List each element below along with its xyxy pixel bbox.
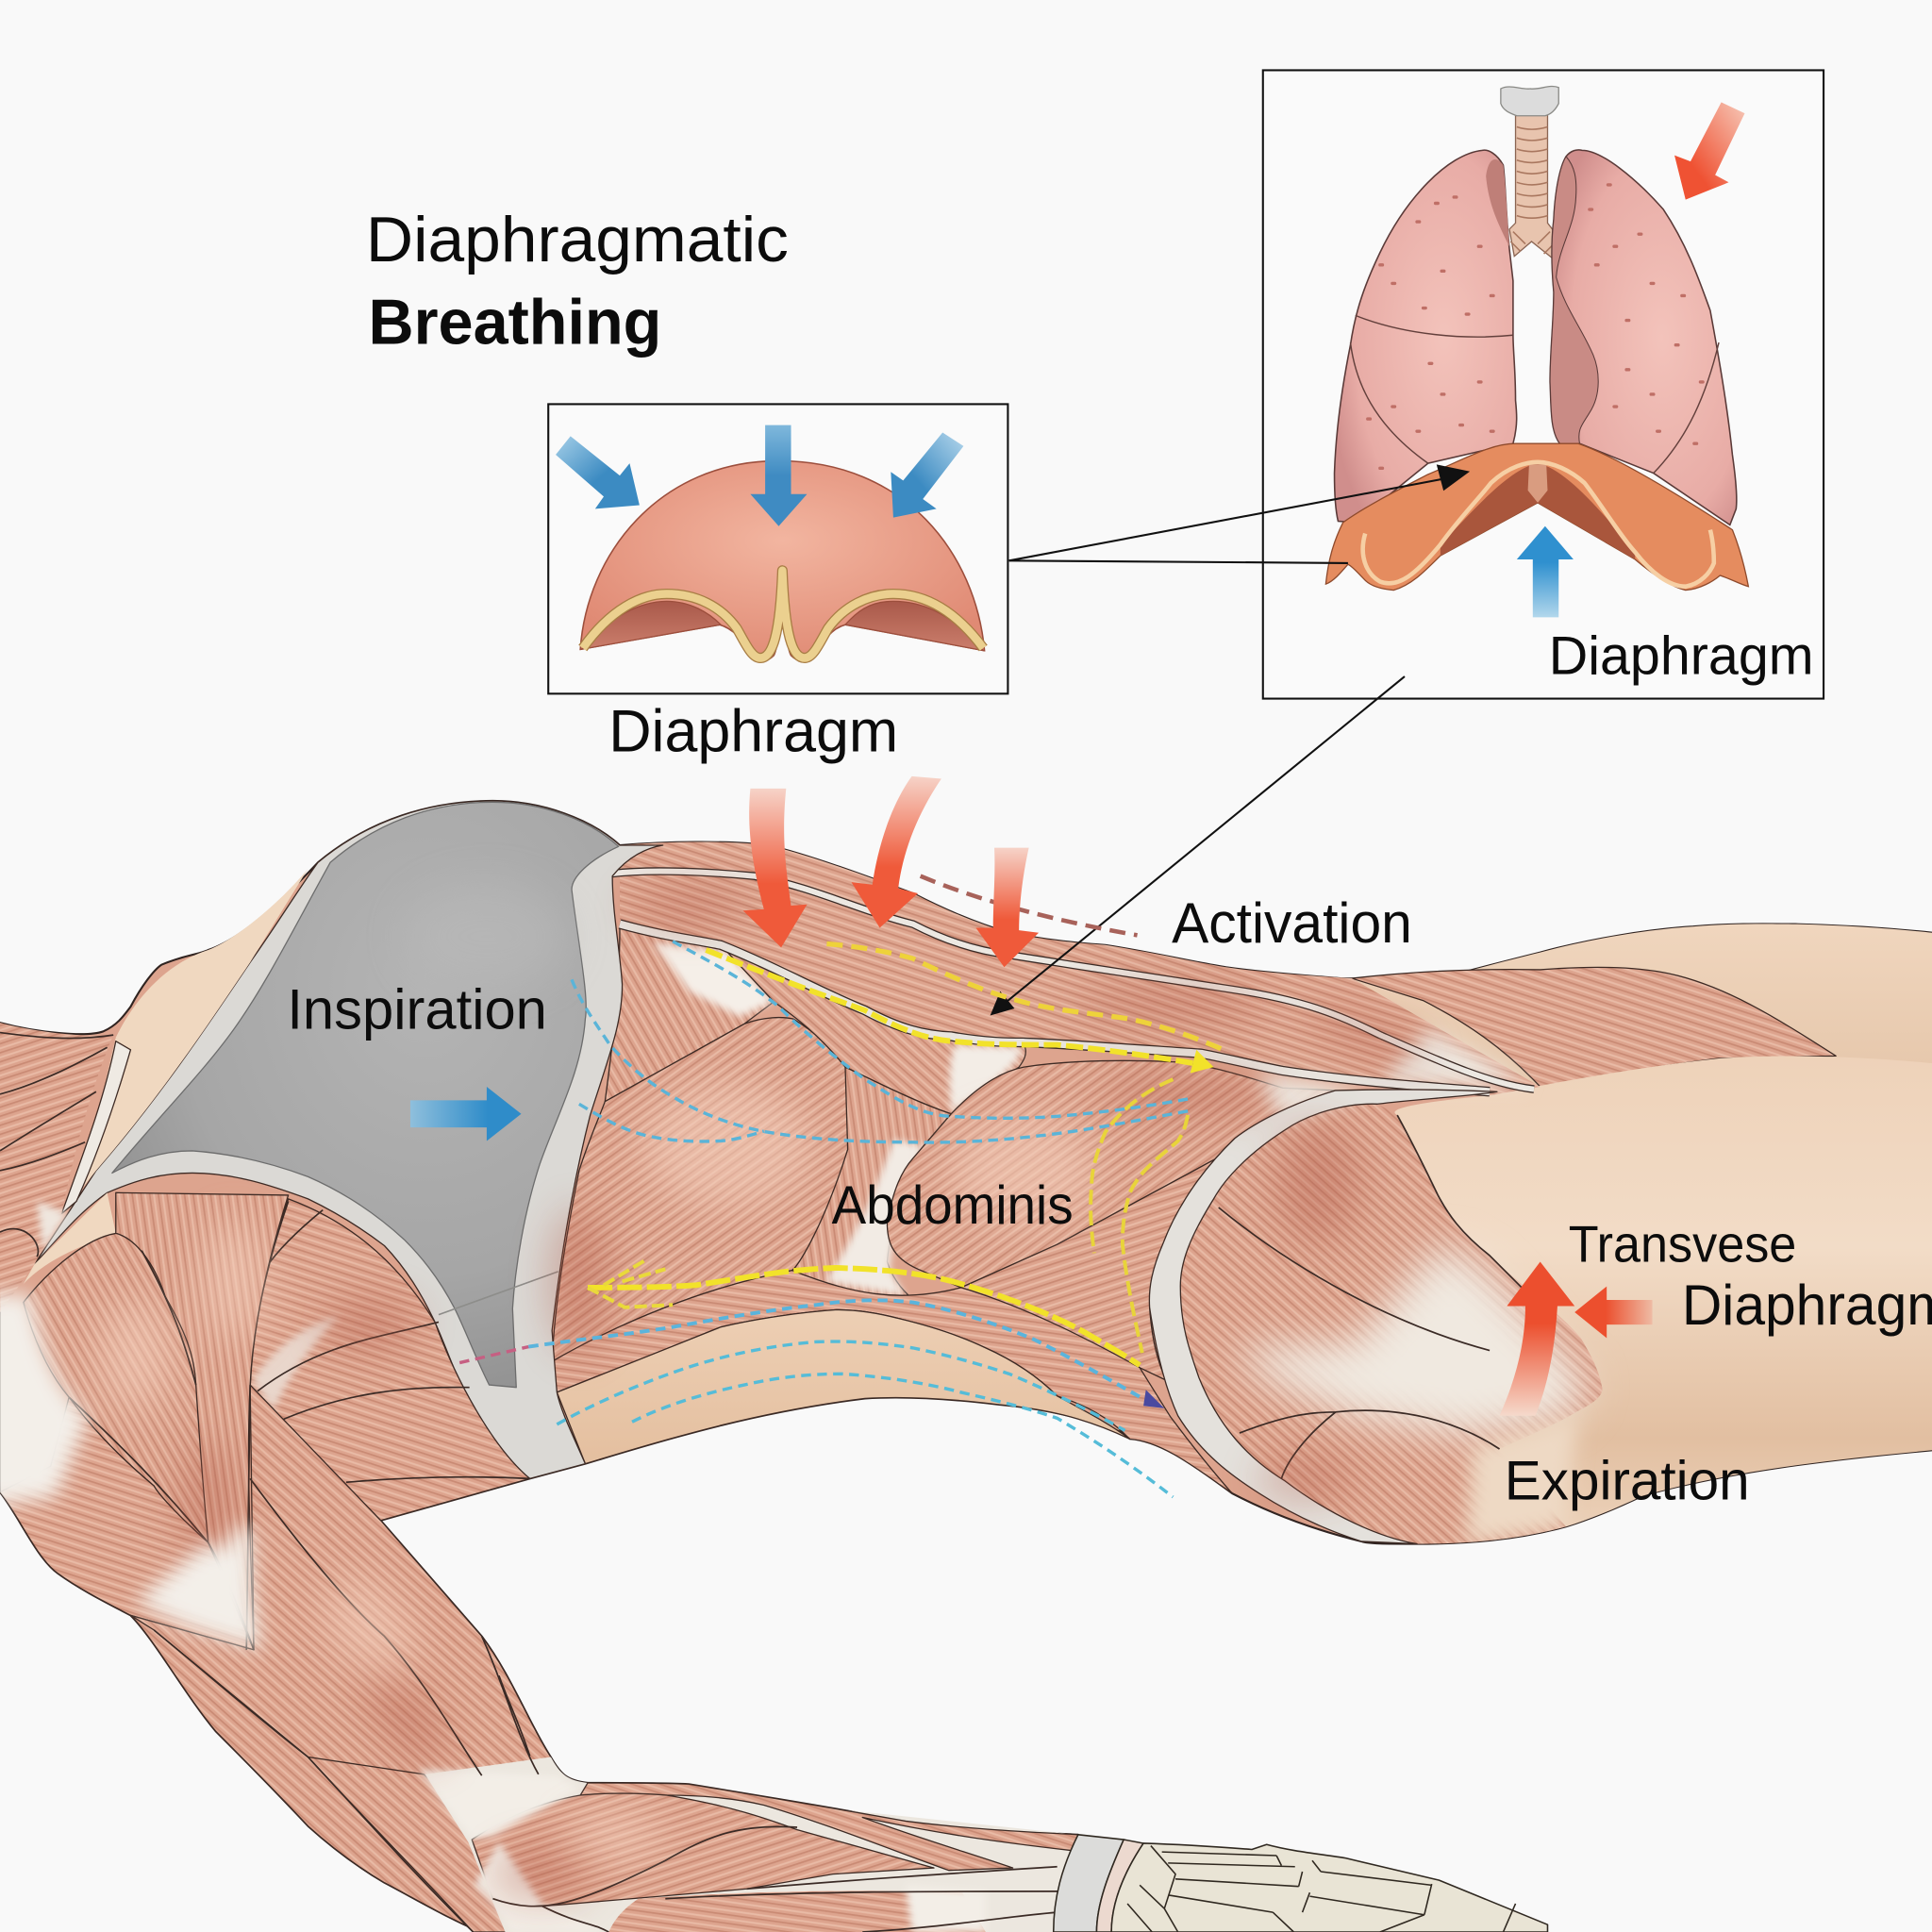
label: transvese: Transvese: [1569, 1214, 1796, 1273]
arrow: red curved up: [1500, 1261, 1574, 1416]
back tendon: [37, 1201, 68, 1251]
left lung medial shade: [1486, 159, 1509, 246]
yellow lower flow: [588, 1268, 1140, 1365]
title: [366, 205, 789, 358]
arm muscle lines: [69, 1251, 539, 1932]
right lung medial shade: [1550, 157, 1598, 443]
panel: diaphragm inset: [548, 404, 1008, 693]
chest pale patch: [253, 1316, 339, 1411]
brown dashed: [921, 876, 1138, 935]
dome: [580, 460, 985, 661]
wrist sliver: [1096, 1840, 1143, 1932]
lower right abdominal muscle: [961, 1154, 1226, 1380]
blue flow one: [673, 941, 1188, 1118]
upper thigh skin: [1352, 924, 1932, 1087]
white tendon caps: [0, 1293, 261, 1651]
light highlight blobs: [98, 1084, 1096, 1858]
arrow: red body one: [743, 789, 808, 947]
label: abdominis: Abdominis: [832, 1175, 1074, 1236]
arrow: red body two: [852, 776, 941, 928]
shoulder white strap: [61, 1041, 130, 1214]
pink flow start: [459, 1347, 528, 1363]
deltoid muscle: [24, 1233, 208, 1542]
title line one: Diaphragmatic: [366, 205, 789, 275]
fascia line lower: [620, 924, 1490, 1091]
abdomen white lines: [612, 872, 1534, 1091]
diaphragm highlight: [1363, 462, 1714, 587]
left lung fissures: [1351, 315, 1513, 463]
fascia line lower fill: [620, 924, 1490, 1091]
serratus muscle: [721, 945, 1025, 1114]
upper band tendon fade: [1380, 1029, 1528, 1084]
trachea rings: [1510, 127, 1554, 254]
title line two: Breathing: [369, 287, 661, 358]
lungs frame: [1263, 70, 1824, 699]
cyan flow lowest: [632, 1374, 1173, 1497]
hip lower fade: [1466, 1417, 1577, 1544]
arrow: blue up: [1517, 526, 1574, 617]
muscle shading overlays: [0, 886, 1438, 1900]
hip muscle lines: [1219, 1115, 1541, 1478]
dark shade blobs: [182, 886, 1438, 1900]
larynx cap: [1501, 86, 1558, 116]
dashed flow lines: [459, 876, 1224, 1497]
garment translucent seam: [439, 1272, 558, 1315]
body silhouette: [0, 801, 1932, 1932]
forearm lower muscle: [608, 1890, 986, 1932]
lower abdominal strip: [552, 1271, 1232, 1493]
forearm fades: [419, 1770, 986, 1932]
shoulder skin: [69, 869, 308, 1205]
forearm upper strip: [580, 1783, 1078, 1871]
abdomen upper band: [620, 842, 1541, 1095]
garment highlight: [407, 885, 567, 989]
arrow: blue centre: [750, 425, 808, 526]
hip tendon fade: [1232, 1244, 1590, 1436]
label: diaphragm in lungs panel: Diaphragm: [1549, 625, 1814, 686]
yellow upper flow two: [826, 943, 1224, 1050]
arrow: blue left: [556, 436, 640, 508]
yellow right second: [1123, 1115, 1188, 1353]
right oblique tendon fade: [1257, 1072, 1368, 1122]
fascia line top fill: [612, 872, 1534, 1090]
cyan flow lower: [557, 1341, 1124, 1430]
body illustration: [0, 801, 1932, 1932]
label: expiration: Expiration: [1505, 1451, 1750, 1512]
forearm oval muscle: [472, 1793, 934, 1907]
yellow arrowhead: [1191, 1050, 1214, 1074]
fascia line top: [612, 872, 1534, 1090]
yellow lower small: [588, 1259, 673, 1307]
right oblique muscle: [887, 1060, 1336, 1288]
yellow right vertical: [1091, 1079, 1173, 1253]
central muscle with linea: [792, 1067, 951, 1304]
rim fill: [583, 571, 983, 658]
wrist band: [1054, 1835, 1124, 1932]
hand bones: [1111, 1843, 1547, 1932]
central arm column: [116, 1192, 289, 1650]
forearm base: [425, 1757, 1078, 1932]
lower arm strip: [130, 1615, 480, 1932]
label: diaphragm under inset: Diaphragm: [608, 699, 898, 765]
skin patch under strap: [24, 1192, 116, 1284]
arrow: blue right: [891, 432, 963, 518]
hip muscle: [1180, 1104, 1602, 1544]
inset frame: [548, 404, 1008, 693]
connector: inset to lungs: [1009, 466, 1468, 563]
forearm muscle lines: [492, 1826, 1059, 1932]
trachea: [1509, 114, 1557, 261]
blue flow two: [572, 979, 1192, 1142]
label: activation: Activation: [1172, 891, 1412, 955]
panel: lungs inset: [1263, 70, 1824, 699]
purple arrowhead: [1143, 1390, 1164, 1408]
arrow: red diagonal: [1674, 102, 1744, 200]
lower shoulder band: [0, 1397, 254, 1650]
right lung fissure: [1654, 342, 1719, 474]
garment grey panel: [112, 802, 619, 1388]
upper thigh muscle: [1352, 967, 1836, 1087]
back muscles left: [0, 1023, 113, 1312]
left oblique muscle: [552, 1018, 849, 1361]
connector: lungs to abdomen: [991, 676, 1405, 1014]
arrowhead on connector: [1438, 466, 1468, 490]
chest muscle lines: [250, 1201, 530, 1482]
label: inspiration: Inspiration: [287, 978, 547, 1041]
back muscle lines: [0, 1033, 113, 1257]
arrowhead: [991, 993, 1013, 1014]
diaphragm central tendon: [1528, 464, 1547, 503]
left underside: [581, 601, 721, 649]
right lung: [1550, 150, 1737, 525]
right underside: [845, 601, 983, 651]
lung speckles: [1368, 185, 1703, 468]
garment pale outline shape: [35, 801, 663, 1478]
rib tendon highlight: [653, 942, 774, 1017]
hip white band: [1149, 1090, 1497, 1544]
rim outline: [583, 571, 983, 658]
lungs diaphragm: [1325, 443, 1748, 591]
thigh skin: [1394, 1057, 1932, 1534]
arrow: blue inspiration: [410, 1087, 521, 1141]
diaphragm under-arch: [1441, 463, 1635, 559]
blue flow three: [579, 1104, 764, 1141]
hand and wrist: [1054, 1835, 1547, 1932]
blue flow four: [528, 1300, 1154, 1405]
arrow: red body three: [975, 848, 1039, 967]
upper left muscle with tendon: [605, 928, 774, 1102]
chest muscles: [246, 1199, 530, 1521]
linea white: [825, 1140, 924, 1296]
arrow: red left: [1574, 1287, 1653, 1338]
yellow upper flow: [706, 950, 1201, 1064]
upper arm muscle: [130, 1385, 558, 1836]
lower arm middle: [308, 1757, 530, 1932]
bone lines: [1127, 1846, 1516, 1932]
left lung: [1335, 150, 1517, 523]
serratus tendon: [950, 1045, 1022, 1112]
lower belly skin: [557, 1309, 1130, 1464]
